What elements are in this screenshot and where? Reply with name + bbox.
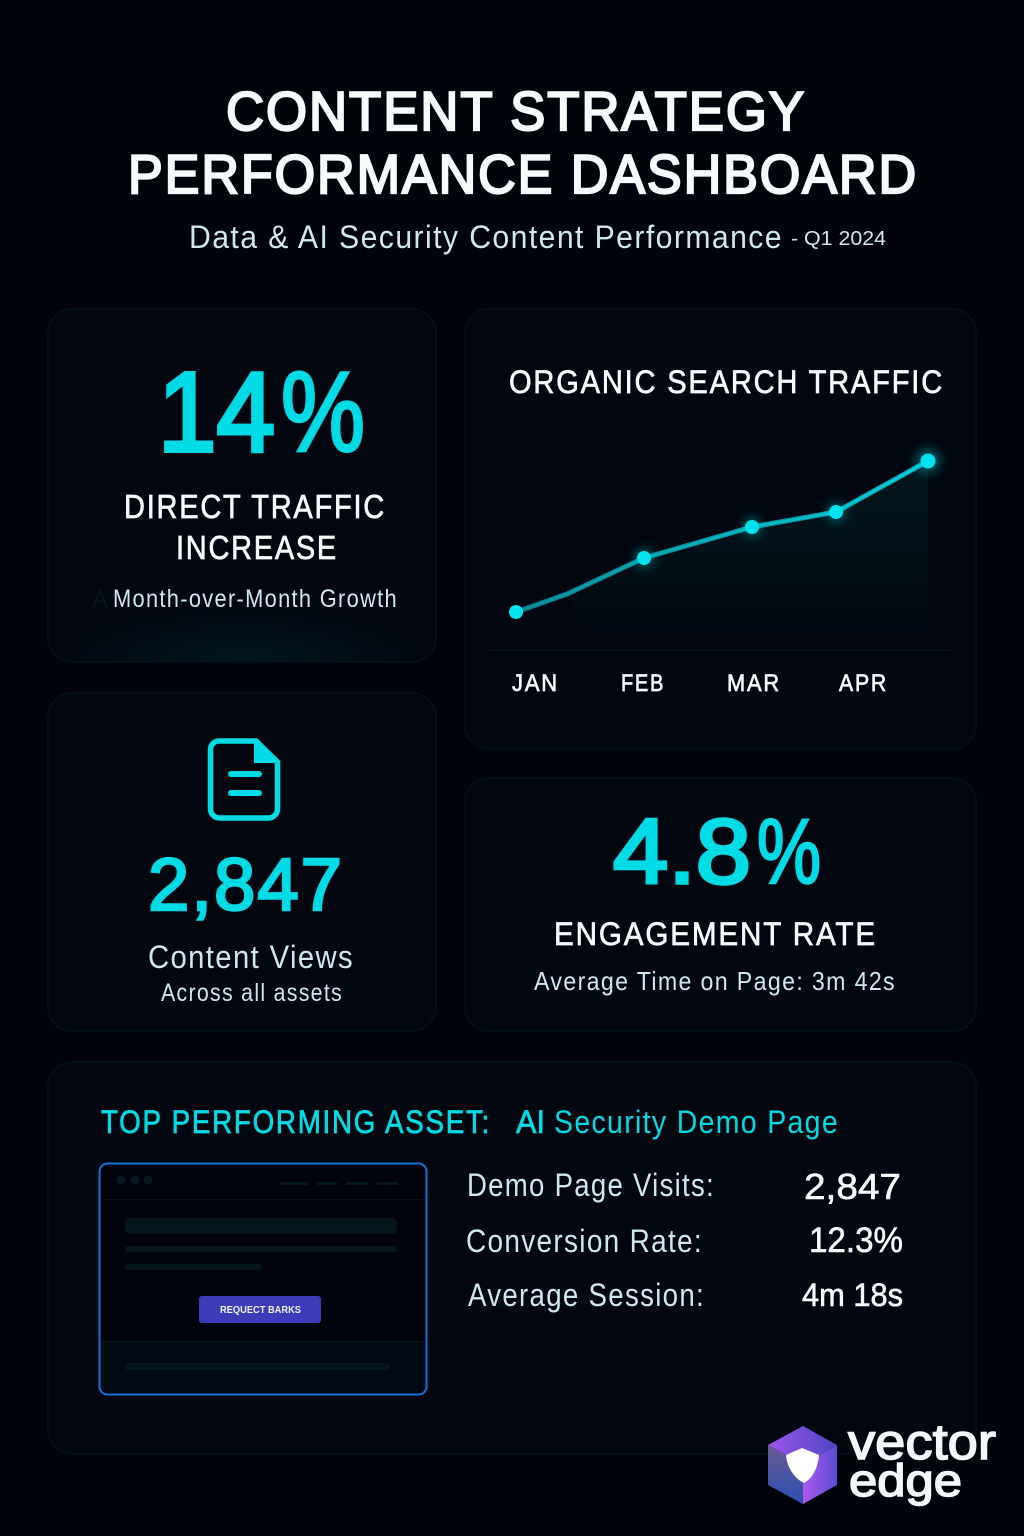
- big stat: 14%: %: [281, 349, 365, 475]
- month labels: FEB: [621, 670, 665, 697]
- big stat: 14%: 14: [158, 349, 275, 475]
- title: PERFORMANCE DASHBOARD: [128, 143, 918, 205]
- big stat: 2,847: 2,847: [148, 843, 344, 926]
- asset heading: AI: [516, 1104, 545, 1140]
- stat: average session: [468, 1277, 903, 1313]
- month labels: [512, 670, 888, 697]
- big stat: 14%: [158, 349, 365, 475]
- button: [199, 1296, 321, 1323]
- title: [128, 80, 918, 205]
- caption: across all assets: Across all assets: [161, 979, 343, 1007]
- label: content views: Content Views: [148, 939, 354, 975]
- label: direct traffic increase: DIRECT TRAFFIC: [124, 488, 386, 525]
- icon: hexagon shield: [768, 1426, 837, 1504]
- panel: organic search traffic: [465, 309, 976, 749]
- chart title: ORGANIC SEARCH TRAFFIC: [509, 364, 944, 400]
- asset heading: [101, 1104, 839, 1140]
- stat: demo page visits: [467, 1166, 901, 1207]
- icon: document: [210, 739, 280, 818]
- big stat: 4.8%: [613, 801, 821, 903]
- panel: engagement rate: [465, 778, 976, 1031]
- stat: conversion rate: Conversion Rate:: [466, 1223, 703, 1259]
- label: engagement rate: ENGAGEMENT RATE: [554, 916, 877, 952]
- month labels: APR: [839, 670, 888, 697]
- label: direct traffic increase: INCREASE: [176, 529, 338, 566]
- big stat: 4.8%: 4.8: [613, 801, 751, 903]
- stat: average session: Average Session:: [468, 1277, 705, 1313]
- asset heading: TOP PERFORMING ASSET:: [101, 1104, 491, 1140]
- line chart: [489, 448, 952, 650]
- faint letter artifact: A: [92, 586, 108, 613]
- panel: top performing asset: [48, 1062, 976, 1454]
- panel: direct traffic: [48, 309, 436, 662]
- demo page screenshot: [100, 1164, 426, 1394]
- wordmark: edge: [849, 1455, 962, 1506]
- subtitle: - Q1 2024: [791, 228, 886, 250]
- caption: average time on page: Average Time on Page: 3m 42s: [534, 966, 896, 996]
- wordmark: vector: [848, 1414, 996, 1470]
- stat: average session: 4m 18s: [802, 1277, 903, 1313]
- stat: conversion rate: 12.3%: [809, 1221, 903, 1260]
- caption: month-over-month growth: Month-over-Month Growth: [113, 585, 398, 613]
- big stat: 4.8%: %: [757, 801, 821, 903]
- button: REQUECT BARKS: [220, 1305, 301, 1316]
- month labels: MAR: [727, 670, 781, 697]
- stat: demo page visits: Demo Page Visits:: [467, 1167, 715, 1203]
- month labels: JAN: [512, 670, 559, 697]
- label: direct traffic increase: [124, 488, 386, 566]
- stat: demo page visits: 2,847: [804, 1166, 901, 1207]
- logo: vector edge: [768, 1414, 996, 1506]
- subtitle: Data & AI Security Content Performance: [189, 219, 783, 255]
- asset heading: Security Demo Page: [554, 1104, 839, 1140]
- stat: conversion rate: [466, 1221, 903, 1260]
- panel: content views: [48, 693, 436, 1031]
- wordmark: [848, 1414, 996, 1506]
- title: CONTENT STRATEGY: [226, 80, 806, 142]
